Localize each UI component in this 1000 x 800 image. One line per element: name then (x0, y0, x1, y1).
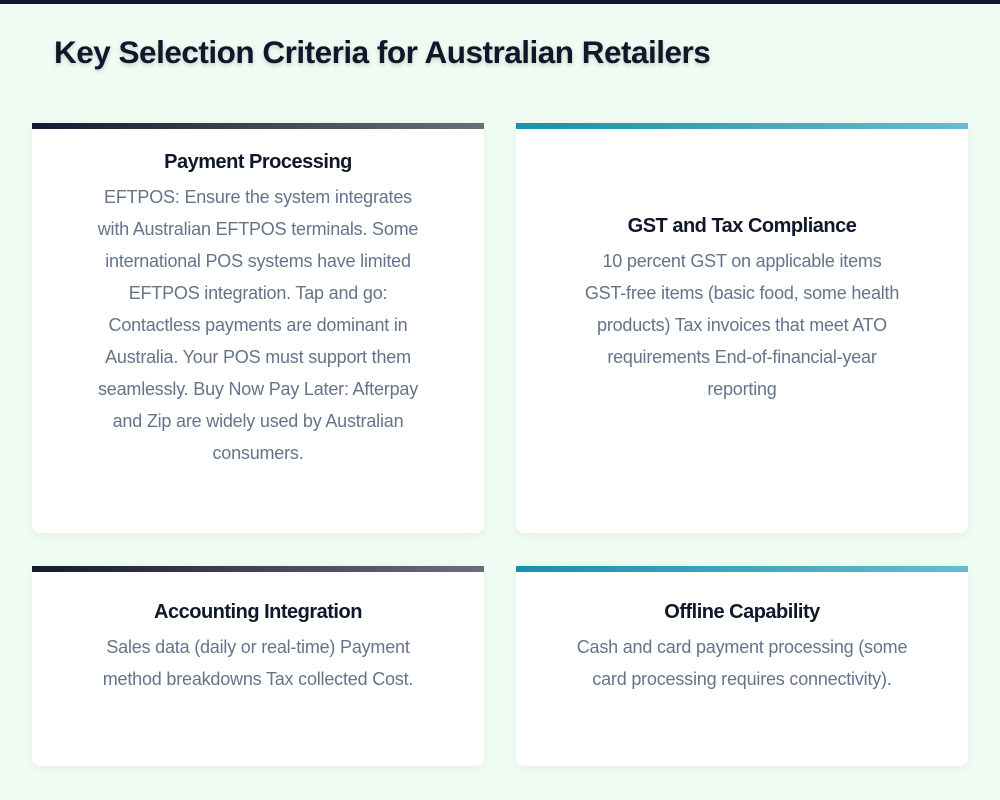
title: Key Selection Criteria for Australian Retailers (54, 34, 710, 70)
heading: offline: Offline Capability (664, 601, 820, 623)
text: GST: 10 percent GST on applicable items (602, 251, 882, 271)
text: payment processing: EFTPOS: Ensure the system integrates with Australian EFTPOS terminals. Some international POS systems have limited EFTPOS integration. Tap and go: Contactless payments are dominant in Australia. Your POS must support them seamlessly. Buy Now Pay Later: Afterpay and Zip are widely used by Australian consumers. (98, 187, 418, 463)
panel: GST (516, 123, 968, 533)
text: offline: card processing requires connectivity). (592, 669, 892, 689)
panel: payment processing (32, 123, 484, 533)
text: offline (577, 637, 907, 689)
panel: accounting (32, 566, 484, 766)
heading: GST: GST and Tax Compliance (628, 215, 856, 237)
text: GST: GST-free items (basic food, some health products) Tax invoices that meet ATO requirements End-of-financial-year reporting (585, 283, 899, 399)
text: offline: Cash and card payment processing (some (577, 637, 907, 657)
text: accounting: Sales data (daily or real-time) Payment method breakdowns Tax collected Cost. (103, 637, 413, 689)
heading: payment processing: Payment Processing (164, 151, 352, 173)
heading: accounting: Accounting Integration (154, 601, 362, 623)
panel: offline (516, 566, 968, 766)
